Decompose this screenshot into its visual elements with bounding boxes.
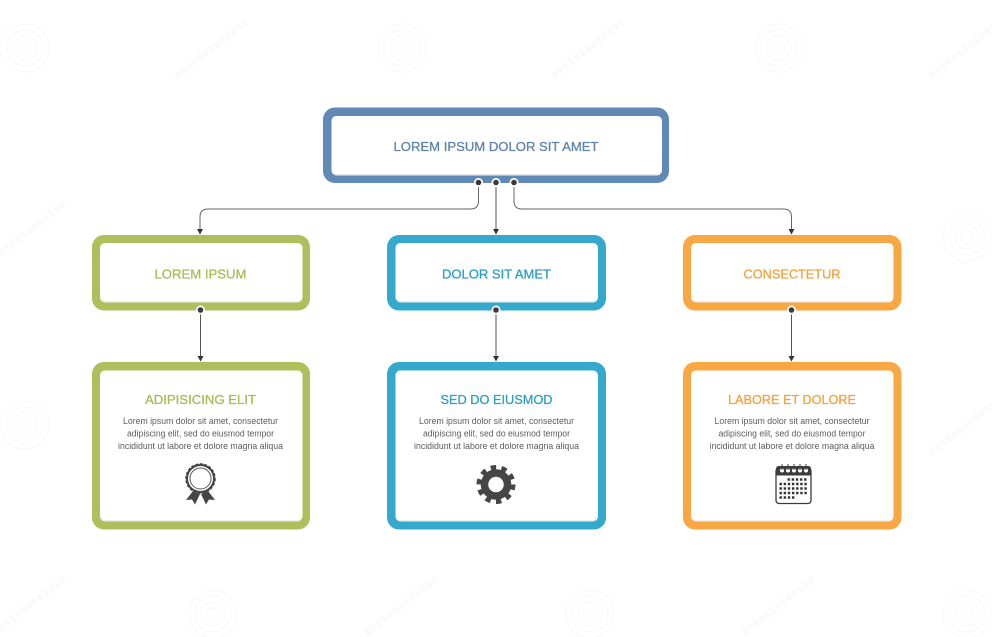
icon: calendar [776, 464, 811, 504]
arrow: top box to centre column [492, 178, 500, 234]
text: orange card body: incididunt ut labore et dolore magna aliqua [710, 441, 874, 451]
arrow: blue header to card [492, 306, 500, 361]
icon: award ribbon [186, 464, 215, 504]
heading: green header: LOREM IPSUM [154, 266, 246, 282]
heading: orange card: LABORE ET DOLORE [728, 392, 856, 407]
text: blue card body [414, 416, 579, 451]
text: orange card body [710, 416, 874, 451]
text: blue card body: Lorem ipsum dolor sit amet, consectetur [419, 416, 574, 426]
text: blue card body: incididunt ut labore et dolore magna aliqua [414, 441, 579, 451]
arrow: top box to right column [510, 178, 792, 234]
text: orange card body: Lorem ipsum dolor sit amet, consectetur [714, 416, 870, 426]
panel: green card [92, 362, 310, 530]
panel: orange header [683, 235, 902, 310]
panel: blue header [387, 235, 606, 310]
panel: blue card [387, 362, 606, 530]
heading: orange header: CONSECTETUR [744, 266, 840, 282]
heading: green card: ADIPISICING ELIT [145, 392, 256, 407]
text: green card body: adipiscing elit, sed do eiusmod tempor [127, 428, 274, 438]
text: blue card body: adipiscing elit, sed do eiusmod tempor [423, 428, 570, 438]
text: green card body [118, 416, 283, 451]
arrow: green header to card [196, 306, 205, 361]
panel: orange card [683, 362, 902, 530]
panel: green header [92, 235, 310, 310]
arrow: orange header to card [787, 306, 796, 361]
heading: blue card: SED DO EIUSMOD [440, 392, 552, 407]
icon: gear [479, 468, 513, 502]
heading: blue header: DOLOR SIT AMET [442, 266, 551, 282]
text: green card body: Lorem ipsum dolor sit amet, consectetur [123, 416, 278, 426]
heading: top box: LOREM IPSUM DOLOR SIT AMET [394, 139, 599, 154]
panel: top box [323, 108, 669, 183]
text: green card body: incididunt ut labore et dolore magna aliqua [118, 441, 283, 451]
arrow: top box to left column [200, 178, 483, 234]
text: orange card body: adipiscing elit, sed do eiusmod tempor [718, 428, 866, 438]
